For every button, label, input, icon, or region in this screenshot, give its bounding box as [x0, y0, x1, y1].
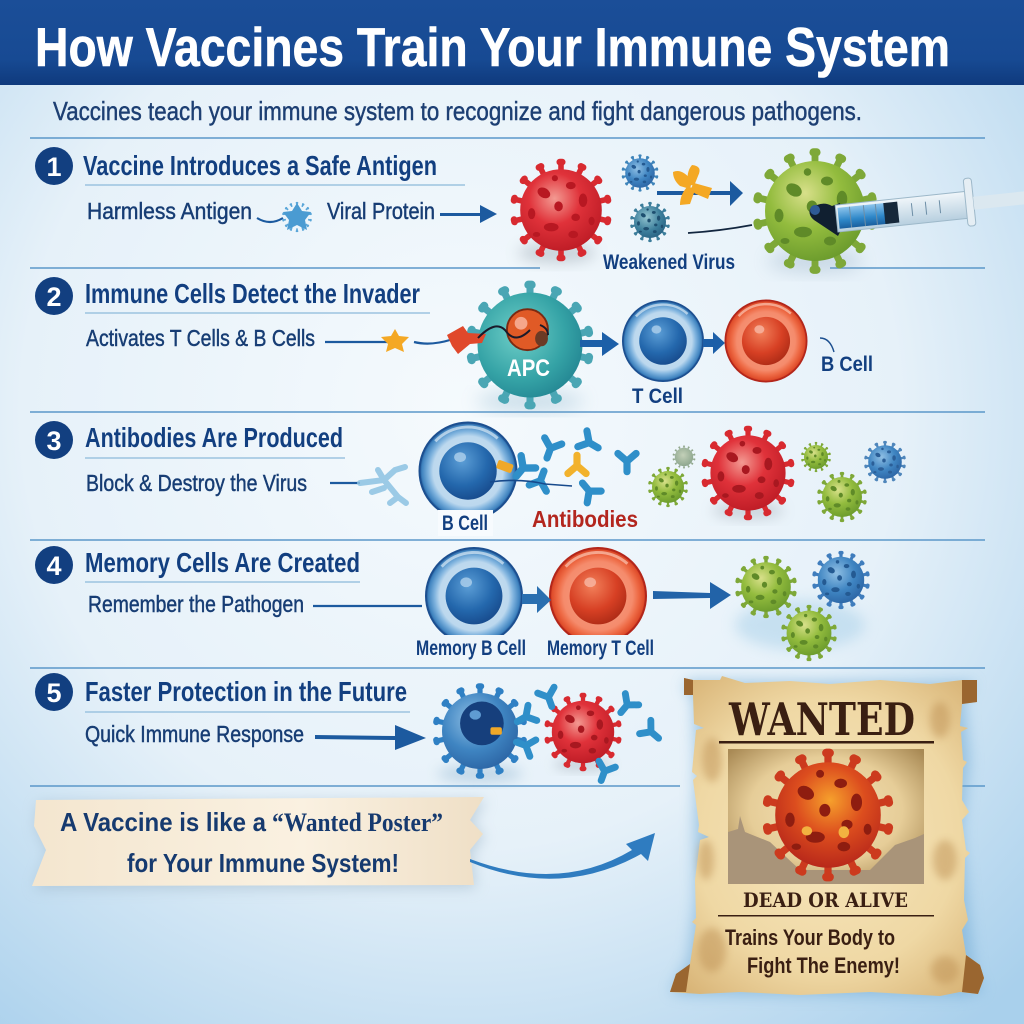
callout banner	[32, 797, 486, 889]
heading step 2: Immune Cells Detect the Invader	[85, 278, 420, 309]
callout text: A Vaccine is like a	[60, 807, 266, 837]
icon: red virus	[514, 162, 608, 263]
panel: step 5	[35, 673, 664, 784]
arrow	[580, 332, 619, 356]
icon: antigen star	[283, 203, 311, 231]
heading step 4: Memory Cells Are Created	[85, 547, 360, 578]
B cell	[725, 300, 807, 382]
step number 2	[35, 277, 73, 315]
icon: blue memory cell	[436, 686, 524, 782]
icon: pathogens	[650, 429, 904, 520]
antibody cluster	[513, 687, 664, 784]
wanted poster: Fight The Enemy!	[747, 953, 900, 978]
panel: step 4	[35, 546, 868, 660]
label: activates cells: Activates T Cells & B Cells	[86, 325, 315, 351]
panel: step 1	[35, 147, 1024, 274]
label: weakened virus: Weakened Virus	[603, 251, 735, 274]
icon: faded antigen	[360, 467, 406, 503]
label: viral protein: Viral Protein	[327, 198, 435, 224]
heading step 3: Antibodies Are Produced	[85, 422, 343, 453]
poster text: Trains Your Body to	[725, 925, 895, 950]
poster subheading: DEAD OR ALIVE	[743, 888, 908, 912]
header band	[0, 0, 1024, 85]
label: remember the pathogen: Remember the Pathogen	[88, 591, 304, 617]
arrow	[657, 181, 743, 206]
icon: red virus	[547, 695, 619, 771]
icon: syringe	[688, 172, 1024, 240]
T cell	[623, 301, 703, 381]
callout banner: for Your Immune System!	[127, 848, 399, 878]
subtitle: Vaccines teach your immune system to recognize and fight dangerous pathogens.	[53, 96, 862, 126]
label: quick immune response: Quick Immune Response	[85, 721, 304, 747]
label: memory T cell: Memory T Cell	[547, 637, 654, 660]
label: antibodies: Antibodies	[532, 506, 638, 532]
label: B cell: B Cell	[821, 353, 873, 376]
label: block and destroy: Block & Destroy the Virus	[86, 470, 307, 496]
wanted poster	[670, 676, 984, 996]
icon: receptor	[447, 326, 486, 354]
step number 5	[35, 673, 73, 711]
icon: memory pathogens	[735, 553, 868, 659]
label: B cell: B Cell	[442, 512, 488, 535]
label: APC: APC	[507, 355, 550, 382]
arrow	[440, 205, 497, 223]
icon: green virus	[757, 152, 873, 272]
arrow	[315, 725, 426, 750]
poster picture	[728, 749, 924, 884]
icon: small teal virus	[632, 203, 668, 241]
arrow: banner to poster	[470, 833, 655, 879]
callout banner: “Wanted Poster”	[272, 808, 443, 837]
icon: wanted virus	[767, 753, 889, 877]
step number 3: 3	[46, 426, 62, 456]
step number 5: 5	[46, 678, 62, 708]
heading step 5: Faster Protection in the Future	[85, 676, 407, 707]
label: T cell: T Cell	[632, 385, 683, 408]
arrow	[653, 582, 731, 609]
poster heading: WANTED	[728, 693, 915, 746]
step number 1	[35, 147, 73, 185]
icon: APC cell	[471, 285, 589, 410]
memory B cell	[426, 548, 522, 644]
antibody cluster	[490, 431, 636, 503]
arrow	[522, 586, 551, 613]
icon: antigen star	[381, 329, 409, 352]
step number 4	[35, 546, 73, 584]
step number 1: 1	[46, 152, 62, 182]
memory T cell	[550, 548, 646, 644]
heading step 1: Vaccine Introduces a Safe Antigen	[83, 150, 437, 181]
icon: small blue virus	[623, 156, 657, 190]
icon: yellow protein	[673, 165, 712, 205]
step number 3	[35, 421, 73, 459]
panel: step 3	[35, 421, 904, 536]
memory cells	[426, 548, 646, 644]
step number 2: 2	[46, 282, 62, 312]
label: harmless antigen: Harmless Antigen	[87, 198, 252, 224]
B cell	[419, 422, 517, 520]
label: memory B cell: Memory B Cell	[416, 637, 526, 660]
step number 4: 4	[46, 551, 62, 581]
arrow	[703, 332, 725, 354]
panel: step 2	[35, 277, 873, 410]
